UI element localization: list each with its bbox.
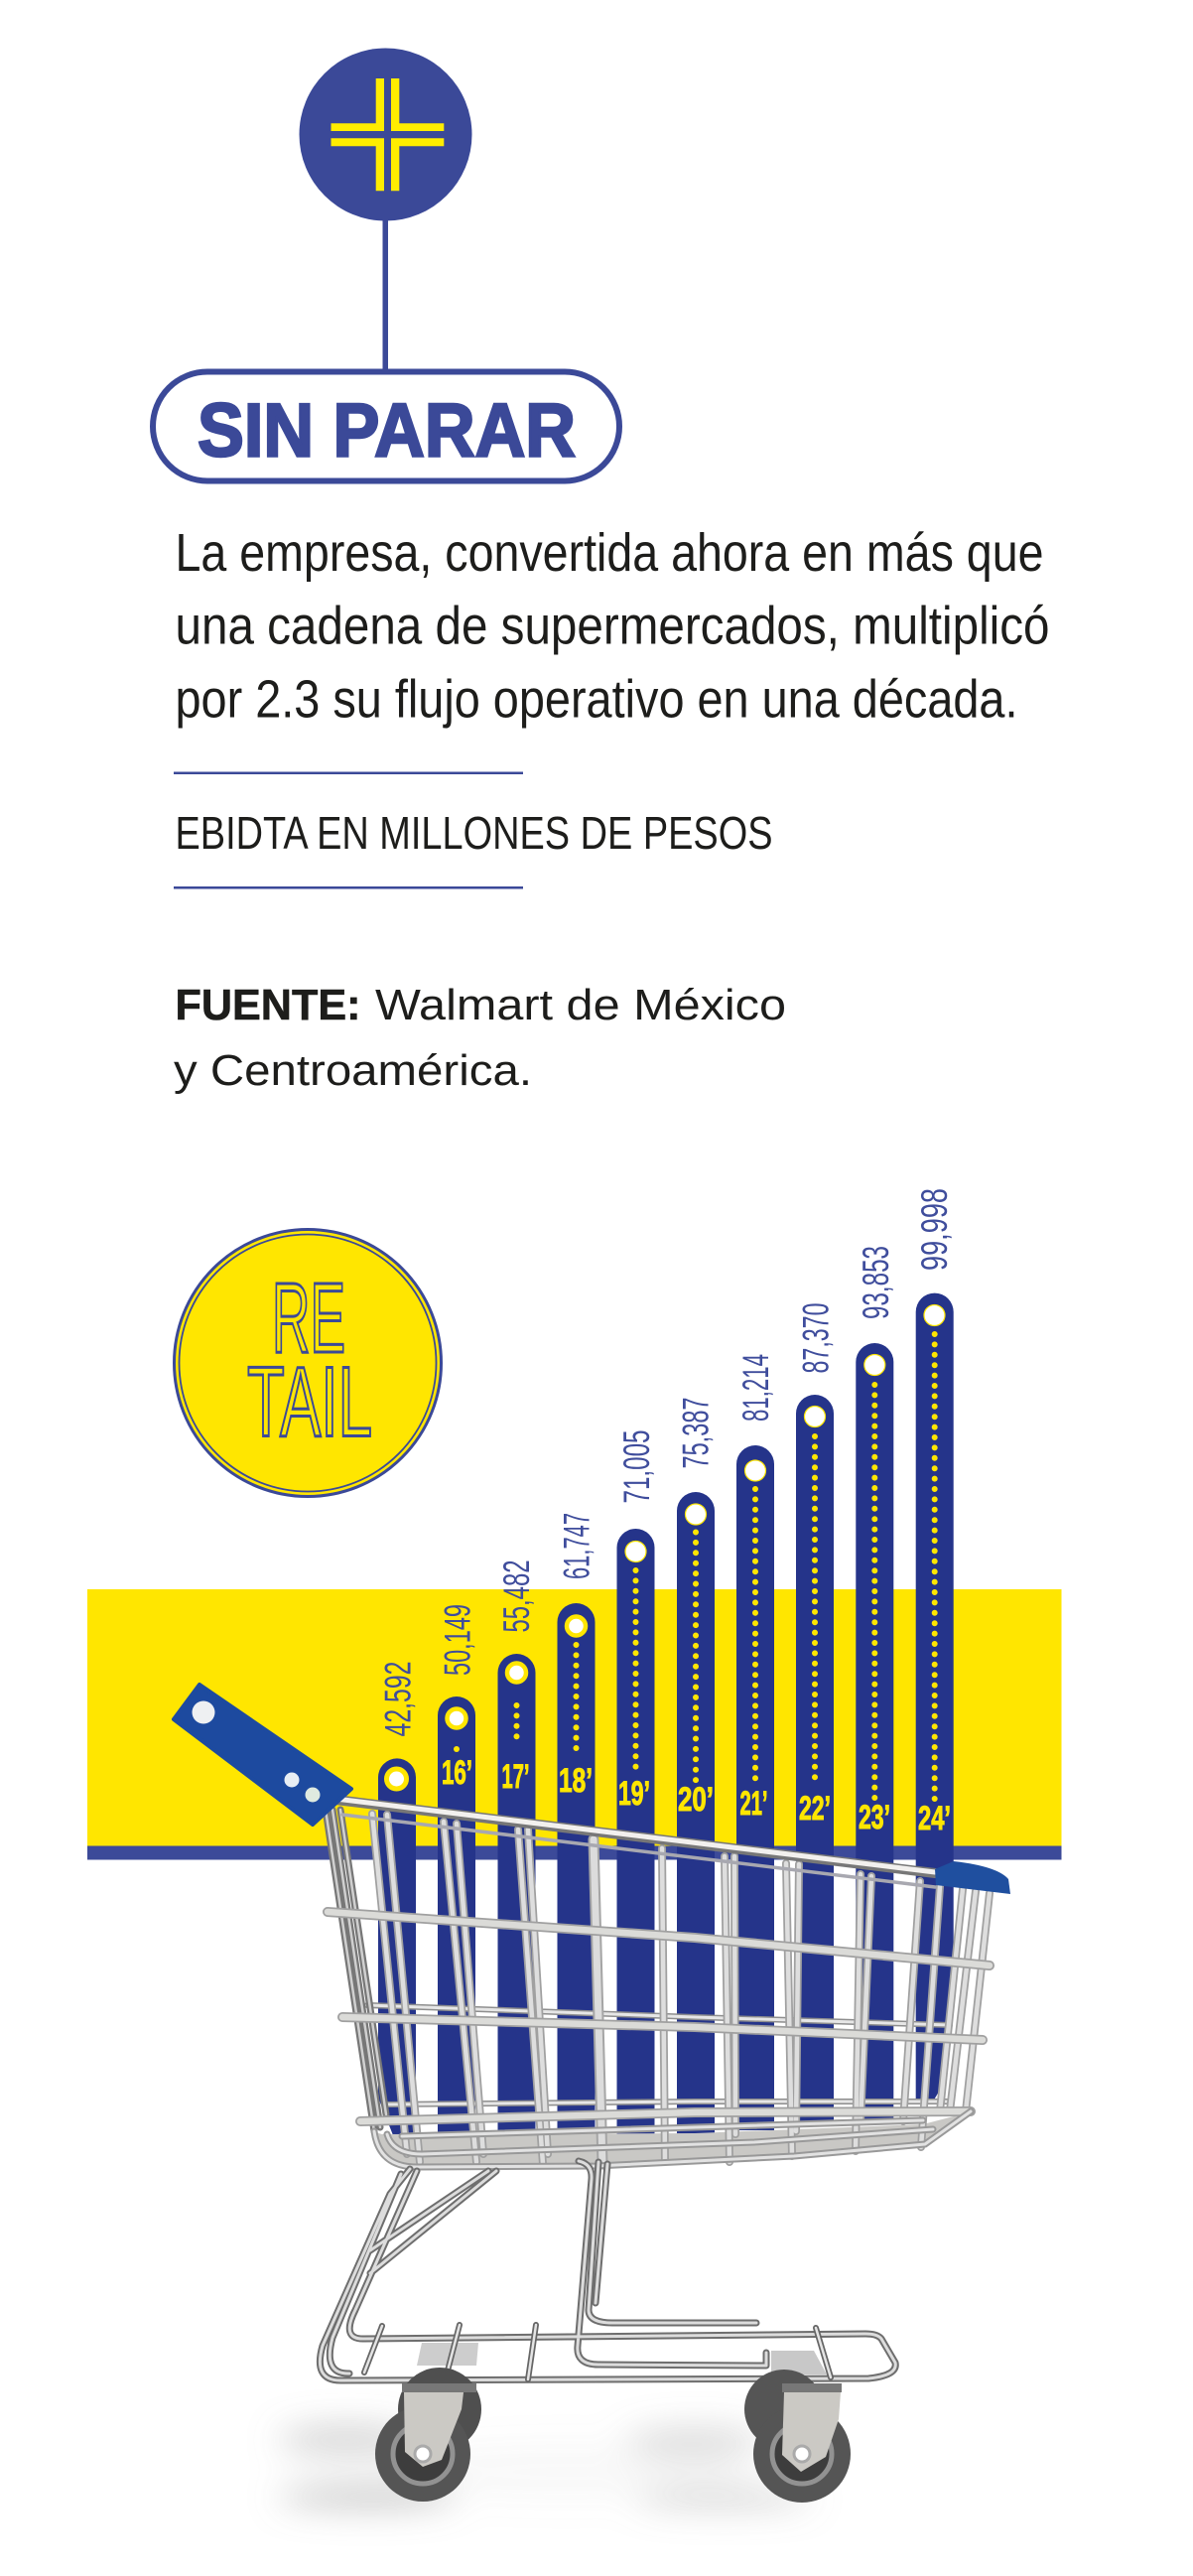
basket tray: [375, 2112, 969, 2167]
right end cap: [935, 1861, 1010, 1894]
source: [174, 981, 786, 1095]
badge: RETAIL: RE: [272, 1263, 345, 1374]
dotted lines: [457, 1334, 935, 1800]
year labels: 20’: [678, 1781, 714, 1819]
text block: intro: una cadena de supermercados, multiplicó: [175, 596, 1050, 655]
value labels: 50,149: [437, 1604, 478, 1676]
source: FUENTE:: [175, 981, 361, 1029]
year labels: 24’: [918, 1800, 951, 1837]
blue handle plate: [174, 1685, 351, 1825]
blue band: [87, 1846, 1062, 1860]
icon: cross in blue circle: [300, 48, 472, 220]
connector line: [383, 219, 388, 371]
text block: intro: por 2.3 su flujo operativo en una década.: [175, 669, 1018, 729]
wheel: front right: [753, 2383, 851, 2503]
text block: intro: La empresa, convertida ahora en más que: [175, 523, 1044, 583]
year labels: 19’: [618, 1775, 650, 1813]
value labels: 61,747: [556, 1513, 597, 1579]
basket wires: [326, 1810, 990, 2164]
bars: [378, 1293, 954, 2135]
source: Walmart de México: [375, 981, 786, 1029]
value labels: 55,482: [496, 1560, 537, 1632]
year labels: 18’: [559, 1762, 593, 1800]
year labels: 17’: [502, 1758, 530, 1796]
subtitle: EBIDTA: EBIDTA EN MILLONES DE PESOS: [175, 807, 772, 859]
value labels: 93,853: [856, 1246, 896, 1319]
year labels: 21’: [740, 1785, 768, 1823]
source: y Centroamérica.: [174, 1046, 532, 1095]
value labels: 99,998: [914, 1188, 955, 1271]
year labels: [442, 1754, 951, 1837]
wheel: front left: [375, 2383, 476, 2502]
top markers: [387, 1304, 945, 1789]
heading: SIN PARAR: [153, 371, 619, 480]
badge: RETAIL: TAIL: [247, 1346, 372, 1457]
heading: SIN PARAR: SIN PARAR: [198, 389, 576, 473]
value labels: [377, 1188, 955, 1737]
value labels: 75,387: [675, 1398, 717, 1469]
text block: intro: [175, 523, 1050, 729]
value labels: 87,370: [796, 1302, 836, 1374]
lower frame: [320, 2161, 895, 2380]
badge: RETAIL: [175, 1229, 441, 1497]
value labels: 42,592: [377, 1662, 419, 1737]
yellow band: [87, 1589, 1062, 1846]
top handle rail: [335, 1799, 935, 1887]
value labels: 81,214: [735, 1354, 776, 1422]
value labels: 71,005: [616, 1429, 657, 1503]
year labels: 22’: [799, 1790, 831, 1828]
basket rails: [328, 1912, 990, 2167]
wheel: rear right: [744, 2370, 824, 2449]
year labels: 16’: [442, 1754, 472, 1792]
shopping cart: [174, 1685, 1010, 2508]
year labels: 23’: [859, 1799, 890, 1836]
wheel: rear left: [398, 2368, 481, 2451]
floor shadow: [278, 2426, 814, 2508]
bar chart: EBITDA 2015-2024: [377, 1188, 955, 2135]
